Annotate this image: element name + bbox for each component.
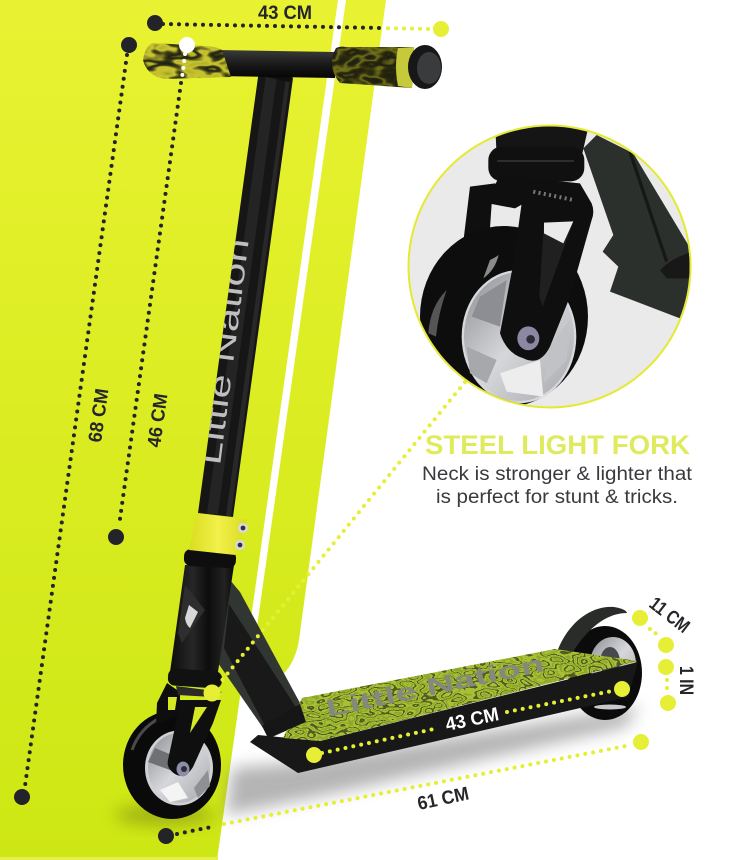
dimension: total height 68 CM: 68 CM	[85, 387, 113, 444]
inset: neck	[496, 126, 588, 154]
inset: strut	[583, 135, 693, 320]
dimension: total length 61 CM	[158, 734, 649, 844]
left grip	[143, 43, 231, 79]
grip end cap	[408, 45, 442, 89]
dimension: bar height 46 CM	[108, 37, 195, 545]
inset: fork rear arm	[463, 183, 524, 242]
handlebar	[143, 43, 442, 89]
head tube	[167, 549, 236, 697]
callout connector dots	[204, 382, 465, 702]
grip tape	[283, 649, 638, 741]
ground shadows	[115, 706, 640, 825]
description text	[422, 464, 693, 508]
scooter	[123, 43, 642, 819]
rear wheel and fender	[552, 607, 642, 720]
inset circle: steel fork close-up	[408, 120, 693, 408]
deck brand text: Little Nation	[324, 650, 546, 723]
inset: hub	[462, 270, 576, 403]
stem tube	[194, 64, 293, 517]
dimension: deck length 43 CM: 43 CM	[444, 704, 501, 736]
description text: is perfect for stunt & tricks.	[436, 487, 678, 508]
fork	[156, 683, 221, 776]
seat clamp	[189, 513, 248, 555]
deck side	[250, 662, 638, 773]
dimension: wheel diameter 11 CM: 11 CM	[645, 593, 693, 638]
dimension: handlebar width 43 CM	[147, 3, 449, 37]
inset: axle bolt	[517, 326, 539, 350]
dimension: deck length 43 CM	[306, 681, 630, 763]
brace strut	[218, 580, 307, 738]
right grip	[332, 47, 414, 88]
dimension: wheel width 1 IN: 1 IN	[675, 666, 696, 695]
heading: steel light fork: STEEL LIGHT FORK	[425, 430, 691, 460]
dimension: total length 61 CM: 61 CM	[416, 784, 471, 815]
dimension: handlebar width 43 CM: 43 CM	[258, 3, 312, 24]
front wheel	[123, 711, 221, 819]
inset: fork plate	[495, 175, 593, 361]
dimension: total height 68 CM	[14, 37, 137, 805]
deck	[250, 649, 638, 773]
grip yellow ring	[396, 47, 414, 88]
dimension: wheel width 1 IN	[658, 659, 696, 711]
inset: collar	[488, 147, 584, 181]
inset: wheel	[420, 226, 588, 407]
description text: Neck is stronger & lighter that	[422, 464, 693, 485]
crossbar	[215, 50, 335, 78]
stem brand text: Little Nation	[194, 237, 256, 467]
dimension: bar height 46 CM: 46 CM	[144, 392, 172, 449]
dimension: wheel diameter 11 CM	[632, 593, 693, 653]
